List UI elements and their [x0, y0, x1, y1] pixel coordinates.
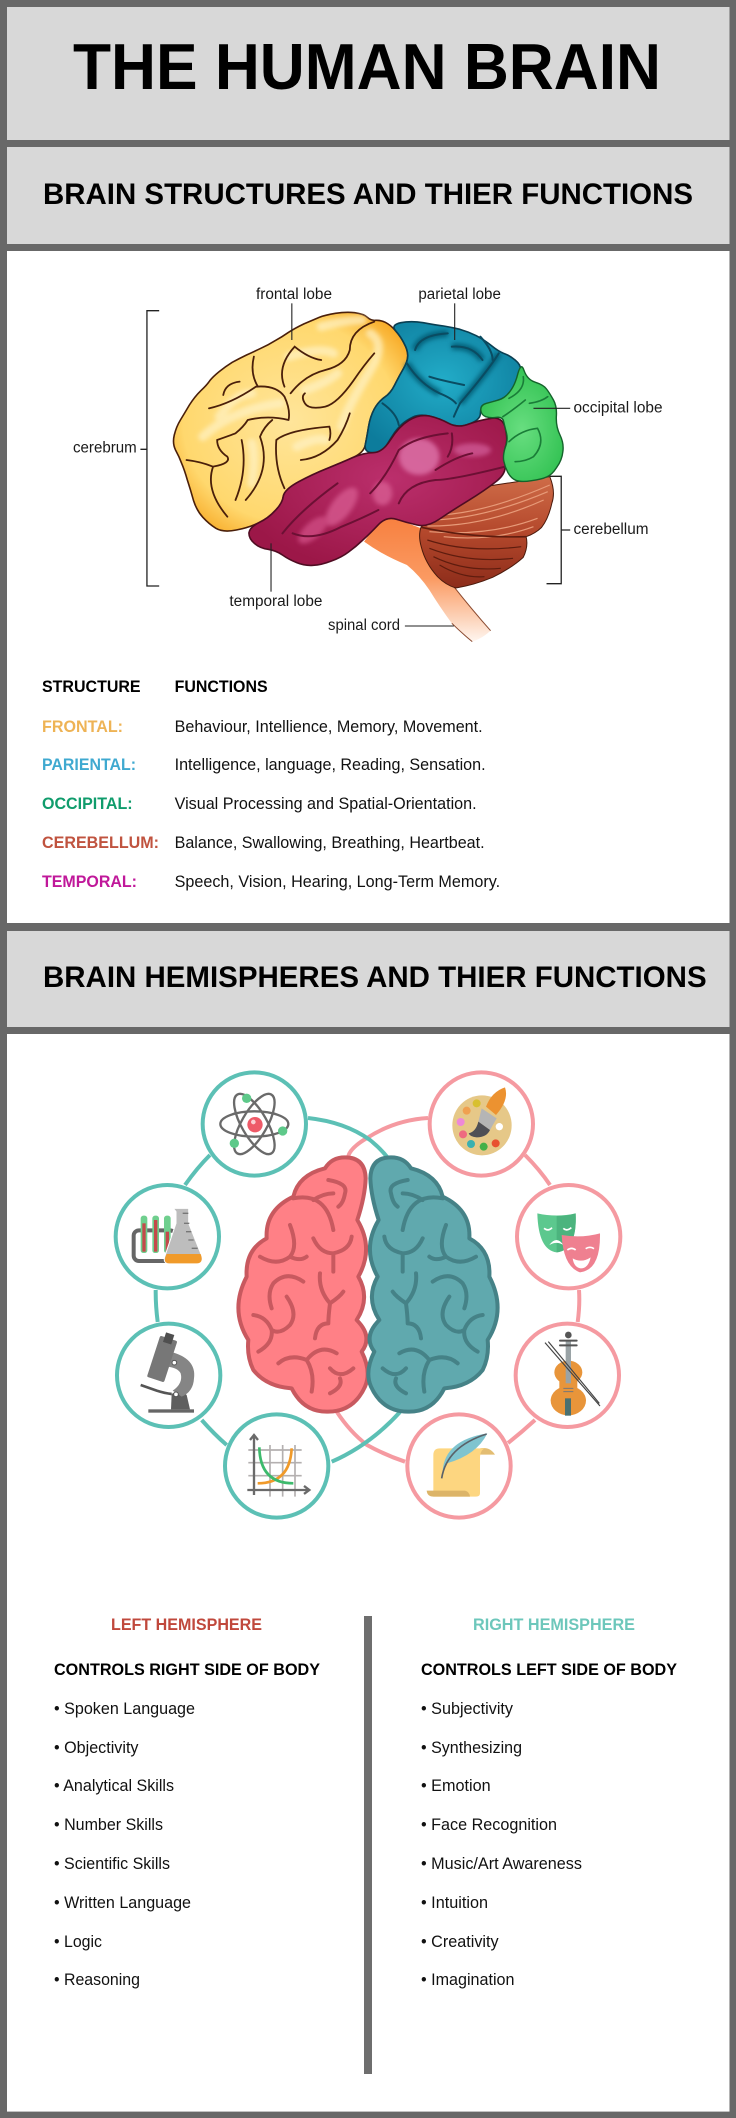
- leader line: spinal cord: [405, 625, 454, 627]
- list: right hemisphere skills: • Imagination: [421, 1971, 514, 1989]
- row: pariental: PARIENTAL:: [42, 755, 136, 774]
- temporal lobe: [249, 416, 507, 565]
- row: frontal: Behaviour, Intellience, Memory, Movement.: [175, 718, 483, 736]
- list: right hemisphere skills: • Face Recognition: [421, 1816, 557, 1834]
- panel: brain hemispheres heading: [7, 931, 730, 1027]
- list: left hemisphere skills: • Reasoning: [54, 1971, 140, 1989]
- table header: structure: STRUCTURE: [42, 677, 141, 696]
- row: cerebellum: CEREBELLUM:: [42, 833, 159, 852]
- list: left hemisphere skills: • Logic: [54, 1933, 102, 1951]
- label: cerebrum: cerebrum: [73, 440, 137, 457]
- subheading: controls left side: CONTROLS LEFT SIDE OF BODY: [421, 1660, 678, 1679]
- list: right hemisphere skills: • Synthesizing: [421, 1739, 522, 1757]
- leader line: parietal lobe: [454, 303, 456, 340]
- connector ring: left hemisphere, teal: [156, 1118, 400, 1462]
- row: pariental: Intelligence, language, Reading, Sensation.: [175, 756, 486, 774]
- list: right hemisphere skills: • Subjectivity: [421, 1700, 514, 1718]
- icon: atom: [203, 1072, 306, 1176]
- heading: brain hemispheres: BRAIN HEMISPHERES AND THIER FUNCTIONS: [43, 961, 707, 994]
- leader line: temporal lobe: [270, 543, 272, 592]
- panel: title banner: [7, 7, 730, 140]
- label: temporal lobe: temporal lobe: [229, 593, 322, 610]
- row: cerebellum: Balance, Swallowing, Breathing, Heartbeat.: [175, 834, 485, 852]
- column divider: [364, 1616, 372, 2074]
- row: frontal: FRONTAL:: [42, 717, 123, 736]
- icon: microscope: [117, 1324, 220, 1427]
- row: occipital: OCCIPITAL:: [42, 794, 133, 813]
- row: temporal: [42, 872, 500, 891]
- title: THE HUMAN BRAIN: [73, 30, 661, 103]
- icon: theatre masks: [517, 1185, 620, 1288]
- icon: paint palette: [430, 1072, 533, 1176]
- connector ring: right hemisphere, pink: [337, 1118, 579, 1462]
- panel: brain hemispheres: [7, 1034, 730, 2112]
- row: occipital: Visual Processing and Spatial-Orientation.: [175, 795, 477, 813]
- cerebrum bracket: [140, 311, 159, 586]
- label: cerebellum: cerebellum: [574, 521, 648, 538]
- icon: quill and scroll: [407, 1414, 511, 1518]
- panel: brain structures heading: [7, 147, 730, 244]
- list: right hemisphere skills: [421, 1700, 582, 1989]
- column: right hemisphere: [421, 1615, 678, 1989]
- list: left hemisphere skills: • Scientific Skills: [54, 1855, 170, 1873]
- cerebellum: [420, 477, 553, 588]
- icon: test tubes and flask: [116, 1185, 219, 1288]
- row: frontal: [42, 717, 483, 736]
- illustration: side view of brain with coloured lobes: [140, 303, 570, 642]
- icon: line graph: [225, 1414, 328, 1518]
- label: parietal lobe: parietal lobe: [418, 286, 501, 303]
- list: left hemisphere skills: • Objectivity: [54, 1739, 139, 1757]
- icon: violin: [516, 1324, 619, 1427]
- subheading: controls right side: CONTROLS RIGHT SIDE OF BODY: [54, 1660, 321, 1679]
- right brain hemisphere: [368, 1157, 498, 1412]
- list: left hemisphere skills: • Written Language: [54, 1894, 191, 1912]
- list: right hemisphere skills: • Intuition: [421, 1894, 488, 1912]
- spinal cord: [364, 515, 491, 642]
- occipital lobe: [481, 367, 563, 481]
- list: left hemisphere skills: • Spoken Language: [54, 1700, 195, 1718]
- diagram: hemispheres with skill icons: [116, 1072, 620, 1518]
- heading: brain structures: BRAIN STRUCTURES AND THIER FUNCTIONS: [43, 178, 693, 211]
- leader line: occipital lobe: [533, 407, 570, 409]
- heading: left hemisphere: LEFT HEMISPHERE: [111, 1615, 262, 1634]
- heading: right hemisphere: RIGHT HEMISPHERE: [473, 1615, 635, 1634]
- row: temporal: TEMPORAL:: [42, 872, 137, 891]
- panel: brain structures: [7, 251, 730, 923]
- label: occipital lobe: occipital lobe: [574, 400, 662, 417]
- leader line: frontal lobe: [291, 303, 293, 340]
- list: right hemisphere skills: • Creativity: [421, 1933, 499, 1951]
- list: right hemisphere skills: • Music/Art Awareness: [421, 1855, 582, 1873]
- list: right hemisphere skills: • Emotion: [421, 1777, 491, 1795]
- table header: functions: FUNCTIONS: [175, 677, 268, 696]
- label: frontal lobe: frontal lobe: [256, 286, 332, 303]
- table: structures and functions: [42, 677, 500, 891]
- label: spinal cord: spinal cord: [328, 617, 400, 634]
- list: left hemisphere skills: • Number Skills: [54, 1816, 163, 1834]
- frontal lobe: [173, 312, 408, 531]
- row: pariental: [42, 755, 486, 774]
- column: left hemisphere: [54, 1615, 321, 1989]
- row: cerebellum: [42, 833, 485, 852]
- parietal lobe: [365, 322, 521, 453]
- row: temporal: Speech, Vision, Hearing, Long-Term Memory.: [175, 873, 500, 891]
- list: left hemisphere skills: [54, 1700, 195, 1989]
- left brain hemisphere: [238, 1157, 368, 1412]
- cerebellum bracket: [547, 476, 570, 584]
- list: left hemisphere skills: • Analytical Skills: [54, 1777, 174, 1795]
- row: occipital: [42, 794, 477, 813]
